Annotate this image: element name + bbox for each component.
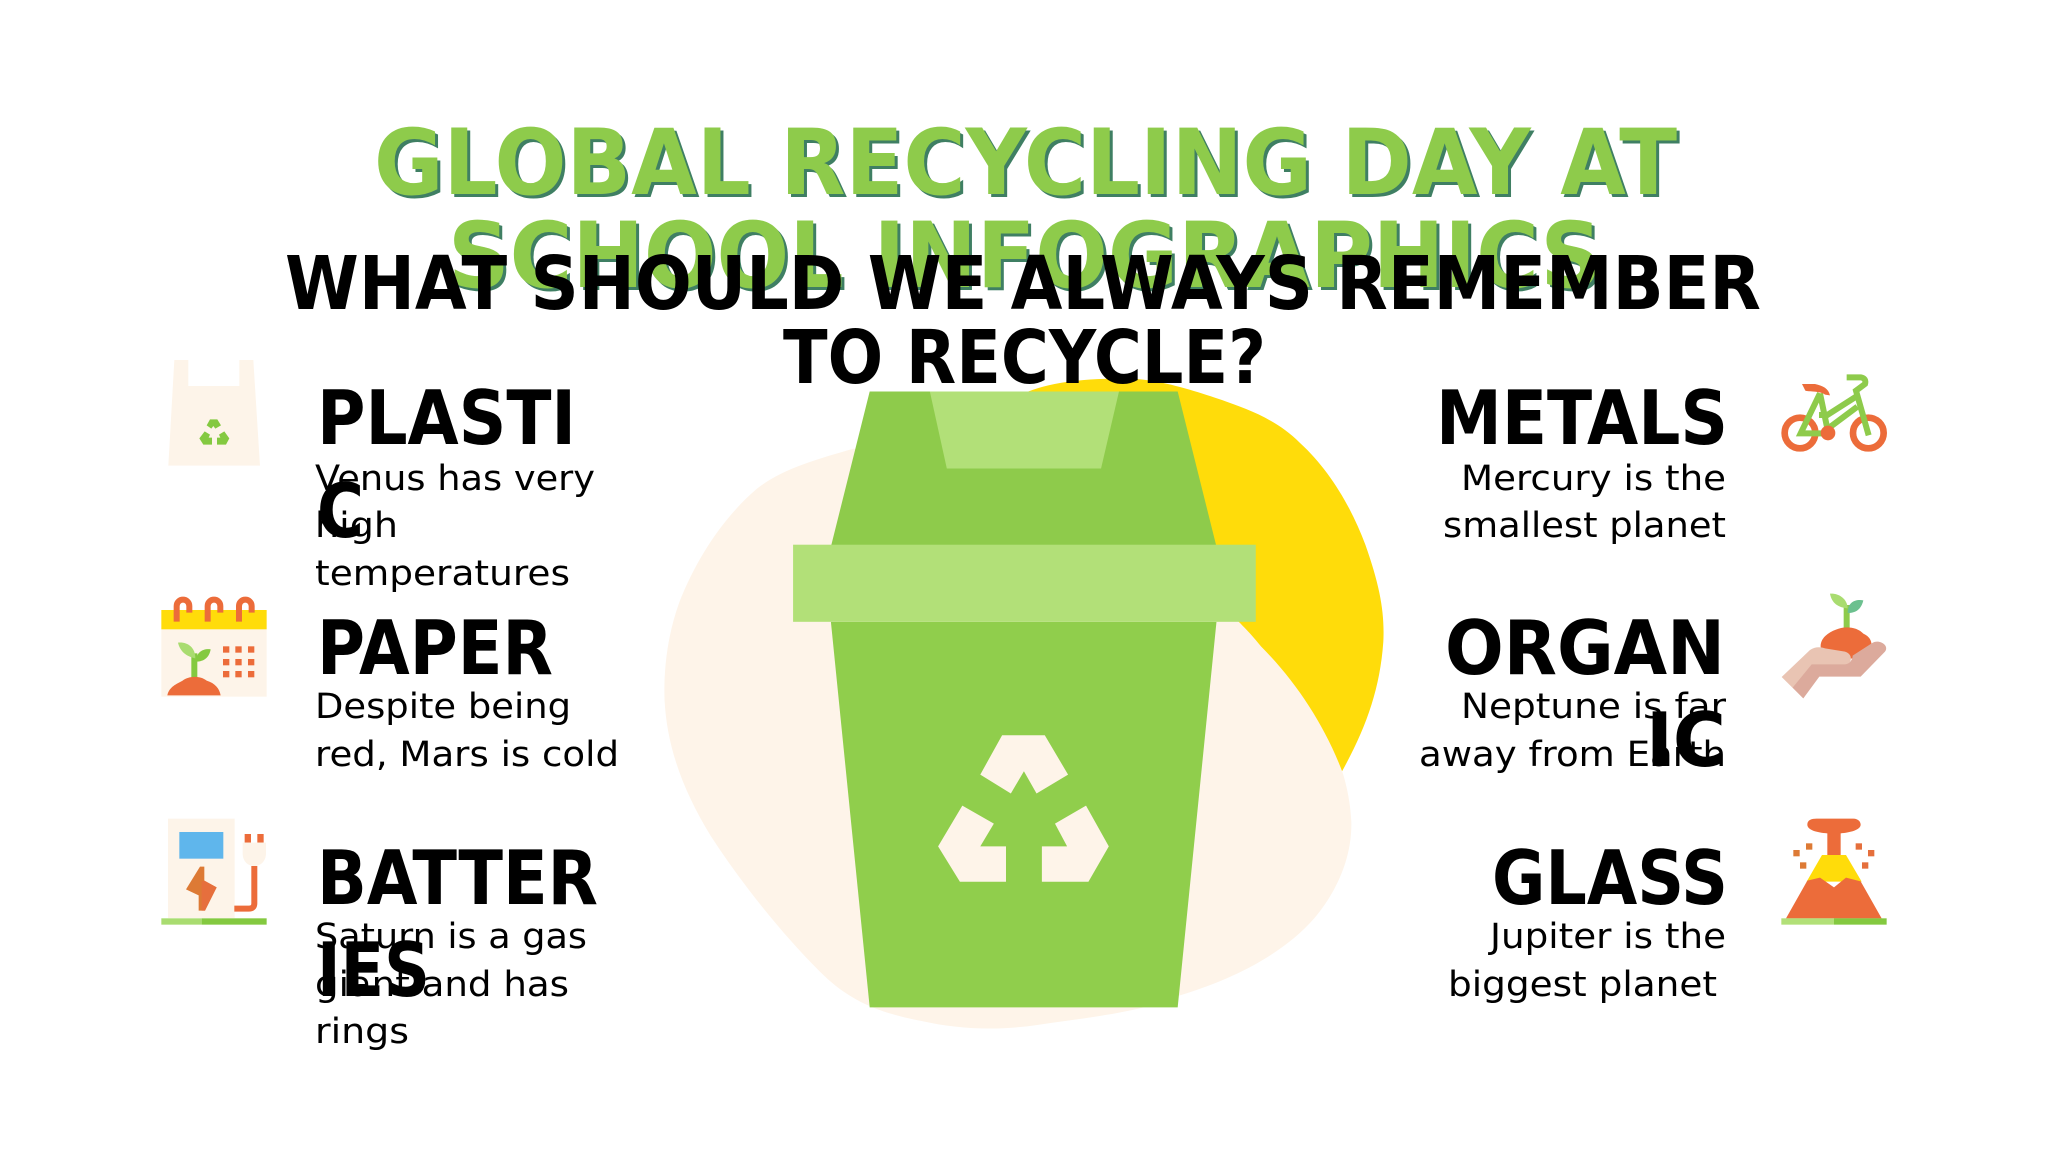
description: plastic: temperatures [315,554,570,594]
blob: yellow [1028,379,1384,771]
description: organic: Neptune is far [1461,687,1727,727]
section heading: TO RECYCLE? [783,315,1266,401]
description: organic [1419,687,1727,775]
icon: volcano [1781,819,1887,925]
description: metals: Mercury is the [1461,459,1726,499]
main title [374,111,1677,309]
icon: bicycle [1785,377,1884,448]
description: plastic [315,459,595,594]
heading: plastic: PLASTI [317,374,576,462]
description: batteries: giant and has [315,965,569,1005]
description: paper: Despite being [315,687,571,727]
lid handle [930,391,1119,469]
item: paper [161,600,619,775]
icon: hand with seedling [1782,594,1886,698]
illustration: recycling bin with background blobs [664,379,1384,1029]
icon: charging station [161,819,267,925]
item: plastic: C [317,467,364,555]
item: glass [1448,819,1887,1005]
heading: glass: GLASS [1492,834,1728,922]
description: batteries: Saturn is a gas [315,917,587,957]
description: metals [1443,459,1726,546]
description: plastic: Venus has very [315,459,595,499]
main title: GLOBAL RECYCLING DAY AT [374,111,1677,216]
description: metals: smallest planet [1443,506,1726,546]
recycling bin [793,391,1256,1007]
icon: plastic bag [168,360,260,466]
icon: calendar with seedling [161,600,267,697]
description: plastic: high [315,506,398,546]
recycling symbol [938,735,1109,882]
item: batteries: IES [317,926,430,1014]
section heading: WHAT SHOULD WE ALWAYS REMEMBER [285,241,1761,327]
description: paper: red, Mars is cold [315,735,619,775]
item: metals [1436,374,1884,546]
heading continuation: organic: IC [1646,696,1726,784]
main title: SCHOOL INFOGRAPHICS [448,204,1602,309]
description: batteries [315,917,587,1052]
description: glass [1448,917,1726,1005]
bin rim [793,545,1256,622]
description: paper [315,687,619,775]
heading: organic: ORGAN [1445,604,1725,692]
description: glass: biggest planet [1448,965,1717,1005]
description: batteries: rings [315,1012,409,1052]
section heading [285,241,1761,401]
item: batteries [161,819,598,1052]
heading: metals: METALS [1436,374,1728,462]
blob: cream [664,449,1351,1029]
bin lid [831,391,1216,547]
item: plastic [168,360,595,594]
heading: paper: PAPER [317,604,553,692]
description: glass: Jupiter is the [1488,917,1726,957]
item: organic [1419,594,1886,784]
description: organic: away from Earth [1419,735,1726,775]
bin body [831,622,1216,1007]
heading: batteries: BATTER [317,834,598,922]
